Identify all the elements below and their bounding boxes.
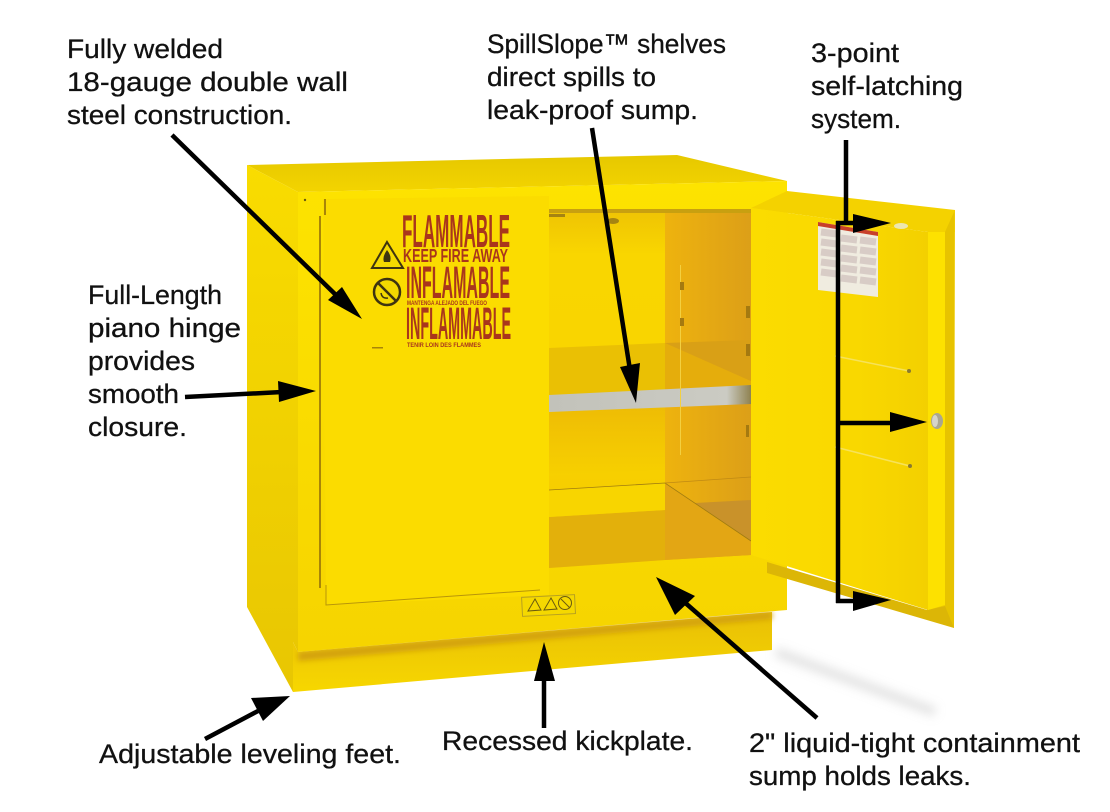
flammable warning text	[402, 205, 511, 349]
flammable warning text: KEEP FIRE AWAY	[403, 246, 508, 266]
recessed kickplate	[293, 612, 772, 692]
arrow: kickplate	[534, 642, 555, 728]
text: latching system	[811, 38, 963, 134]
text: piano hinge: piano hinge	[88, 313, 241, 343]
steel shelf front	[549, 385, 751, 412]
door return flange	[928, 232, 945, 610]
door brackets	[835, 356, 912, 468]
safety cabinet: INFLAMABLE	[406, 257, 510, 308]
floor shadow	[776, 652, 935, 712]
text: welded construction: Fully welded	[67, 34, 223, 64]
cabinet front frame	[298, 181, 787, 652]
text: welded construction: 18-gauge double wall	[67, 67, 348, 97]
closed left door	[304, 196, 549, 605]
flammable warning text: TENIR LOIN DES FLAMMES	[407, 343, 481, 349]
interior top shadow and latch	[549, 209, 751, 455]
text: welded construction	[67, 34, 348, 130]
text: latching system: self-latching	[811, 71, 963, 101]
top latch	[894, 223, 908, 229]
safety cabinet: INFLAMMABLE	[406, 298, 511, 349]
safety cabinet: FLAMMABLE	[402, 205, 510, 257]
text: piano hinge: closure.	[88, 412, 187, 442]
door inner face	[751, 208, 928, 610]
text: containment sump: 2" liquid-tight containment	[749, 728, 1081, 758]
arrows: three-point latching	[836, 140, 927, 611]
arrow: leveling feet	[205, 696, 290, 739]
sump floor	[549, 477, 751, 568]
door bottom lip	[767, 562, 954, 628]
safety cabinet	[247, 155, 955, 692]
open right door	[751, 191, 955, 628]
cabinet top	[247, 155, 787, 192]
text: containment sump	[749, 728, 1081, 791]
shadow beneath shelf	[549, 406, 665, 476]
door top lip	[751, 191, 955, 232]
text: containment sump: sump holds leaks.	[749, 761, 971, 791]
text: piano hinge: Full-Length	[88, 280, 222, 310]
text: latching system: 3-point	[811, 38, 900, 68]
lock	[931, 413, 943, 429]
text: welded construction: steel construction.	[67, 100, 292, 130]
text: piano hinge	[88, 280, 241, 442]
interior side wall	[665, 210, 751, 560]
text: SpillSlope shelves: SpillSlope™ shelves	[487, 29, 726, 59]
warning pictogram plate	[522, 595, 575, 616]
arrow: containment sump	[656, 577, 817, 718]
text: SpillSlope shelves	[487, 29, 726, 125]
arrow: shelves	[592, 128, 640, 403]
text: piano hinge: smooth	[88, 379, 179, 409]
text: leveling feet: Adjustable leveling feet.	[99, 739, 401, 769]
icon: no open flame	[374, 279, 400, 305]
cabinet left side	[247, 165, 298, 692]
arrow: welded construction	[172, 135, 362, 319]
flammable warning text: MANTENGA ALEJADO DEL FUEGO	[407, 301, 487, 307]
text: kickplate: Recessed kickplate.	[442, 726, 693, 756]
arrow: piano hinge	[185, 381, 316, 402]
interior back wall	[549, 212, 665, 568]
safety instructions label	[818, 222, 878, 297]
text: latching system: system.	[811, 104, 901, 134]
text: SpillSlope shelves: leak-proof sump.	[487, 95, 698, 125]
door outer edge	[927, 210, 955, 628]
upper shelf surface	[549, 343, 665, 396]
text: SpillSlope shelves: direct spills to	[487, 62, 656, 92]
icon: flame warning triangle	[372, 242, 403, 268]
text: piano hinge: provides	[88, 346, 195, 376]
